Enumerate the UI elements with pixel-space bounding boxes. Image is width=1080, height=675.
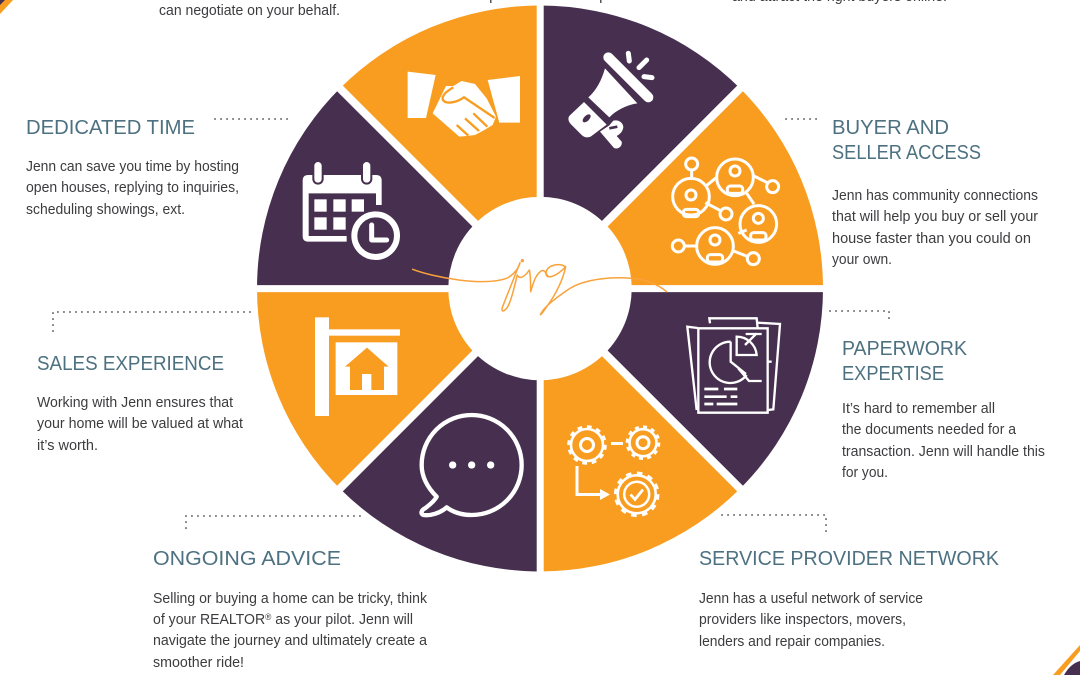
text: ongoing advice body: smoother ride! [153, 654, 244, 671]
text: service provider network body [699, 590, 923, 650]
corner decoration: top left [0, 0, 13, 14]
icon: gears process [569, 427, 658, 515]
text: ongoing advice body: navigate the journey and ultimately create a [153, 632, 428, 649]
text block: negotiation (cropped): can negotiate on your behalf. [159, 2, 340, 19]
text: buyer and seller access body: that will help you buy or sell your [832, 208, 1038, 225]
text: sales experience body: it’s worth. [37, 437, 98, 454]
text: service provider network body: providers like inspectors, movers, [699, 611, 906, 628]
heading: paperwork expertise [842, 338, 968, 385]
heading: buyer and seller access: SELLER ACCESS [832, 142, 981, 164]
panel: dedicated time [26, 117, 292, 218]
icon: handshake [408, 72, 520, 137]
heading: dedicated time: DEDICATED TIME [26, 117, 195, 139]
text: sales experience body [37, 394, 244, 454]
heading: buyer and seller access [832, 117, 981, 164]
icon: chat bubble [422, 415, 522, 515]
panel: ongoing advice [153, 516, 428, 671]
text: dedicated time body [26, 158, 239, 218]
text: paperwork expertise body: the documents needed for a [842, 421, 1017, 438]
icon: calendar with clock [303, 161, 397, 257]
heading: paperwork expertise: PAPERWORK [842, 338, 968, 360]
wheel of eight segments [250, 0, 830, 580]
heading: sales experience: SALES EXPERIENCE [37, 353, 224, 375]
text: paperwork expertise body: transaction. Jenn will handle this [842, 443, 1045, 460]
text: dedicated time body: open houses, replying to inquiries, [26, 179, 239, 196]
text: buyer and seller access body [832, 187, 1038, 268]
icon: documents with pie chart [687, 318, 780, 413]
text: ongoing advice body: ® [265, 612, 272, 622]
heading: service provider network: SERVICE PROVIDER NETWORK [699, 548, 1000, 570]
corner decoration: bottom right [1053, 645, 1080, 675]
icon: megaphone [568, 53, 652, 149]
panel: paperwork expertise [830, 311, 1045, 481]
text: ongoing advice body [153, 590, 428, 671]
text: ongoing advice body: Selling or buying a home can be tricky, think [153, 590, 427, 607]
text: buyer and seller access body: your own. [832, 251, 892, 268]
text: sales experience body: Working with Jenn ensures that [37, 394, 234, 411]
heading: ongoing advice: ONGOING ADVICE [153, 548, 341, 570]
text: ongoing advice body: as your pilot. Jenn will [271, 611, 413, 628]
text: buyer and seller access body: house faster than you could on [832, 230, 1031, 247]
panel: service provider network [699, 515, 1000, 650]
text: dedicated time body: scheduling showings, ext. [26, 201, 185, 218]
heading: paperwork expertise: EXPERTISE [842, 363, 944, 385]
text: paperwork expertise body [842, 400, 1045, 481]
panel: sales experience [37, 312, 250, 454]
icon: for sale sign with house [315, 317, 400, 416]
text: ongoing advice body: of your REALTOR [153, 611, 272, 628]
logo: jrg signature [413, 259, 667, 315]
panel: buyer and seller access [786, 117, 1038, 268]
text: paperwork expertise body: It’s hard to remember all [842, 400, 995, 417]
text: sales experience body: your home will be valued at what [37, 415, 244, 432]
icon: network of people [672, 158, 779, 265]
text: paperwork expertise body: for you. [842, 464, 888, 481]
heading: buyer and seller access: BUYER AND [832, 117, 949, 139]
text: service provider network body: lenders and repair companies. [699, 633, 885, 650]
text: buyer and seller access body: Jenn has community connections [832, 187, 1038, 204]
text: dedicated time body: Jenn can save you time by hosting [26, 158, 239, 175]
text: service provider network body: Jenn has a useful network of service [699, 590, 923, 607]
text fragments: cropped line above wheel [490, 0, 602, 3]
